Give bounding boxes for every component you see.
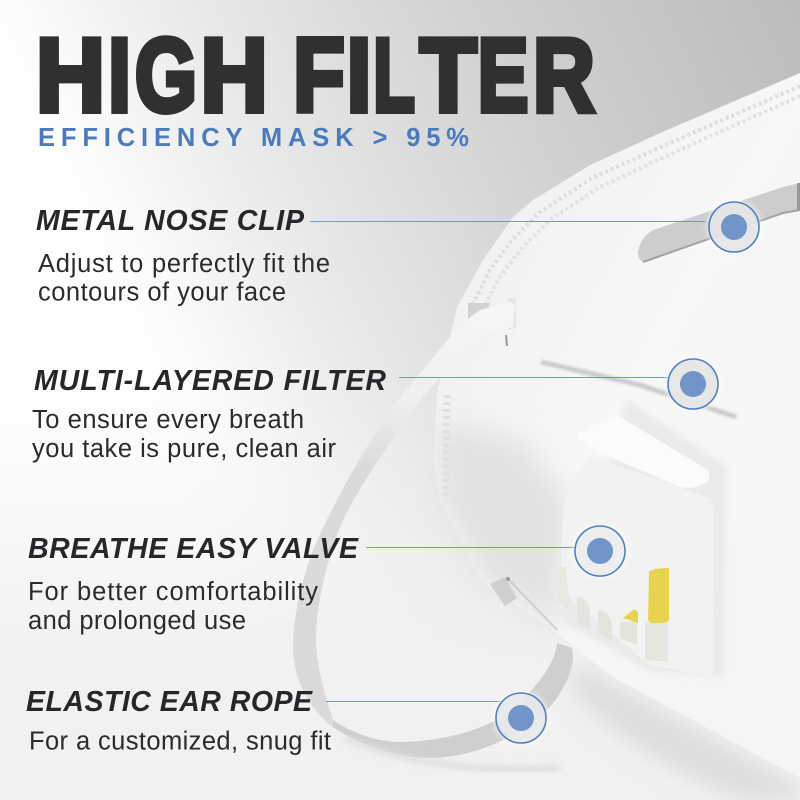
title: L xyxy=(373,18,415,134)
description: For a customized, snug fit xyxy=(29,728,331,756)
title: I xyxy=(108,18,131,134)
title: H xyxy=(201,18,268,134)
description: contours of your face xyxy=(38,278,286,306)
marker: ear rope xyxy=(494,691,548,745)
leader line xyxy=(366,546,575,548)
elastic ear rope xyxy=(293,302,573,758)
callout: multi-layered filter xyxy=(32,365,668,463)
title: T xyxy=(420,18,477,134)
fold crease xyxy=(541,362,736,417)
leader line xyxy=(399,376,668,378)
mask lower left shading xyxy=(438,420,570,630)
callout: metal nose clip xyxy=(36,205,706,306)
title: E xyxy=(478,18,528,134)
mask product image xyxy=(293,73,800,800)
heading: MULTI-LAYERED FILTER xyxy=(34,365,386,397)
heading: ELASTIC EAR ROPE xyxy=(26,686,313,718)
leader line xyxy=(326,700,500,702)
valve slots xyxy=(557,567,570,610)
marker: valve xyxy=(573,524,627,578)
description: you take is pure, clean air xyxy=(32,435,336,463)
description: To ensure every breath xyxy=(32,406,304,434)
description: For better comfortability xyxy=(28,578,318,606)
valve frame xyxy=(560,400,727,677)
title: G xyxy=(135,18,197,134)
metal nose clip xyxy=(638,183,800,262)
valve cap xyxy=(577,415,709,488)
callout: breathe easy valve xyxy=(28,533,575,635)
heading: BREATHE EASY VALVE xyxy=(28,533,359,565)
title: F xyxy=(293,18,345,134)
description: and prolonged use xyxy=(28,607,246,635)
valve body xyxy=(560,457,713,677)
title: H xyxy=(36,18,105,134)
marker: filter xyxy=(666,357,720,411)
strap attachment lower xyxy=(490,577,517,606)
title: I xyxy=(347,18,371,134)
description: Adjust to perfectly fit the xyxy=(38,250,330,278)
mask body xyxy=(433,73,800,778)
title: R xyxy=(533,18,595,134)
marker: nose clip xyxy=(707,200,761,254)
leader line xyxy=(310,220,706,222)
rope lower shaded part xyxy=(333,643,573,758)
strap attachment upper xyxy=(468,303,490,322)
subtitle: EFFICIENCY MASK > 95% xyxy=(38,124,469,152)
stitched seam along mask edge xyxy=(445,86,800,500)
heading: METAL NOSE CLIP xyxy=(36,205,305,237)
ground shadow xyxy=(572,662,800,800)
callout: elastic ear rope xyxy=(26,686,500,756)
rope shadow xyxy=(345,738,560,769)
